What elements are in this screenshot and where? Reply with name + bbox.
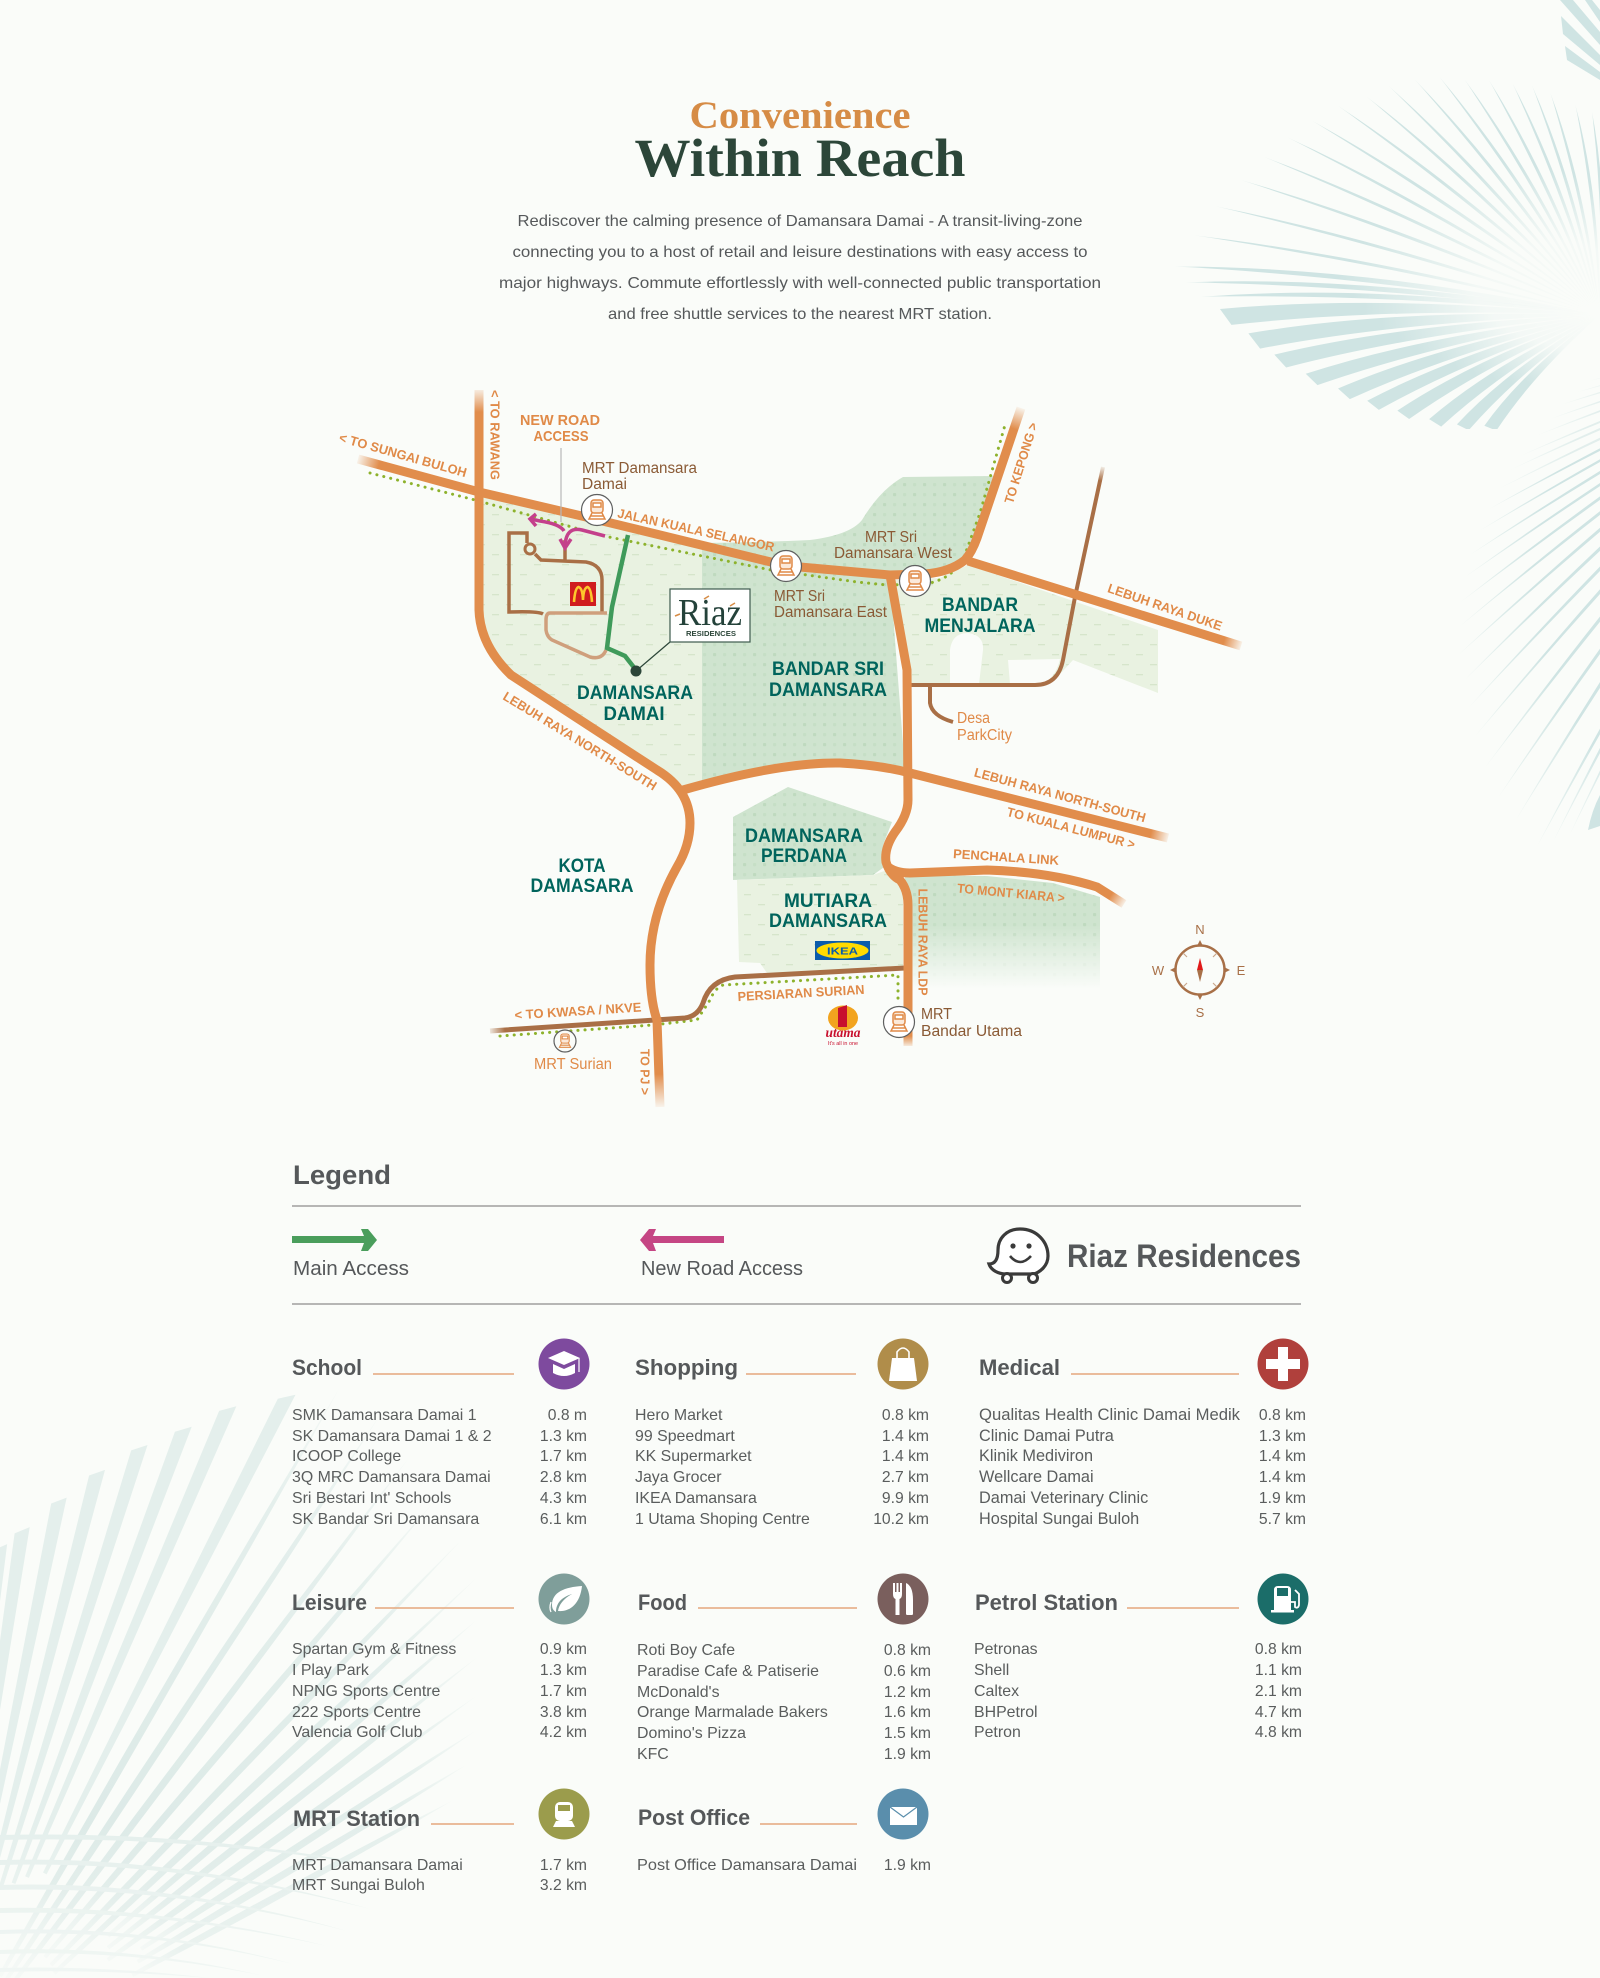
1 Utama logo: utama [826, 1026, 860, 1041]
area names: DAMANSARA [769, 680, 887, 701]
medical list: 1.3 km [1259, 1428, 1306, 1445]
school list: 1.3 km [540, 1428, 587, 1445]
shopping list: KK Supermarket [635, 1448, 752, 1465]
medical list [979, 1406, 1306, 1528]
IKEA logo: IKEA [827, 946, 859, 958]
road labels: < TO KWASA / NKVE [514, 1000, 642, 1022]
decoration: palm fan top right [1175, 72, 1600, 434]
leisure list: Valencia Golf Club [292, 1724, 423, 1741]
medical list: 1.4 km [1259, 1469, 1306, 1486]
road labels: TO KUALA LUMPUR > [1005, 804, 1137, 852]
medical list: 1.4 km [1259, 1448, 1306, 1465]
medical list: Klinik Mediviron [979, 1447, 1093, 1465]
panel: food: Food [638, 1590, 687, 1615]
area: Bandar Menjalara [895, 565, 1158, 693]
decoration: palm fan right [1452, 327, 1600, 848]
school list [292, 1407, 587, 1528]
MRT Damansara Damai station [582, 460, 697, 526]
school list: 3Q MRC Damansara Damai [292, 1469, 491, 1486]
school list: Sri Bestari Int' Schools [292, 1490, 451, 1507]
area names: DAMANSARA [769, 911, 887, 932]
waze destination name: Riaz Residences [1067, 1238, 1301, 1274]
medical list: Wellcare Damai [979, 1468, 1094, 1486]
compass [1152, 922, 1246, 1020]
icon: fork and knife [878, 1574, 928, 1624]
medical list: Qualitas Health Clinic Damai Medik [979, 1406, 1241, 1424]
waze icon [989, 1229, 1048, 1282]
Desa ParkCity label [957, 710, 1012, 744]
title: Within Reach [634, 128, 966, 188]
medical list: 5.7 km [1259, 1511, 1306, 1528]
food list: 1.6 km [884, 1704, 931, 1721]
title: Convenience [690, 94, 910, 137]
MRT Sri Damansara West station [834, 529, 953, 596]
medical list: 0.8 km [1259, 1407, 1306, 1424]
panel: MRT station [292, 1788, 590, 1894]
area names: DAMANSARA [577, 683, 693, 704]
school list: 0.8 m [548, 1407, 587, 1424]
food list: Domino's Pizza [637, 1725, 746, 1742]
MRT list: MRT Damansara Damai [292, 1857, 463, 1874]
local brown roads [490, 467, 1103, 1031]
petrol list: 4.7 km [1255, 1704, 1302, 1721]
main access green route [607, 535, 636, 670]
panel: post office: Post Office [638, 1805, 750, 1830]
petrol list: Petronas [974, 1641, 1038, 1658]
panel: post office [637, 1788, 931, 1874]
icon: shopping bag [878, 1338, 928, 1390]
leisure list: 3.8 km [540, 1704, 587, 1721]
shopping list: IKEA Damansara [635, 1490, 757, 1507]
decoration: palm fan bottom left [0, 1385, 480, 1978]
shopping list: Jaya Grocer [635, 1469, 722, 1486]
legend heading: Legend [293, 1160, 391, 1190]
panel: MRT station: MRT Station [293, 1806, 420, 1831]
MRT list [292, 1857, 587, 1894]
panel: petrol station [974, 1574, 1308, 1741]
school list: ICOOP College [292, 1448, 401, 1465]
medical list: 1.9 km [1259, 1490, 1306, 1507]
petrol list: 1.1 km [1255, 1662, 1302, 1679]
legend: new road access: New Road Access [641, 1258, 803, 1280]
shopping list: 1.4 km [882, 1428, 929, 1445]
road labels: < TO SUNGAI BULOH [337, 430, 469, 480]
area names: BANDAR SRI [772, 659, 884, 680]
food list: Roti Boy Cafe [637, 1642, 735, 1659]
map [337, 386, 1246, 1110]
decoration: palm broad stroke right [1588, 795, 1600, 830]
Riaz pin and logo [630, 589, 750, 676]
area: Damansara Perdana [733, 787, 892, 880]
Riaz pin and logo: Riaz [678, 592, 742, 634]
decoration: bottom corner fade [0, 1820, 420, 1978]
MRT Sri Damansara East station [770, 550, 888, 621]
petrol list: Shell [974, 1662, 1009, 1679]
road labels: PENCHALA LINK [953, 846, 1060, 868]
school list: 2.8 km [540, 1469, 587, 1486]
compass: N [1195, 922, 1205, 937]
icon: leaf [538, 1574, 590, 1624]
Desa ParkCity label: ParkCity [957, 727, 1012, 744]
panel: petrol station: Petrol Station [975, 1590, 1118, 1615]
petrol list [974, 1641, 1302, 1741]
road labels: LEBUH RAYA NORTH-SOUTH [500, 689, 660, 793]
school list: 6.1 km [540, 1511, 587, 1528]
1 Utama logo: It's all in one [828, 1041, 858, 1047]
shopping list: Hero Market [635, 1407, 723, 1424]
local tan road [546, 613, 607, 658]
food list: 1.9 km [884, 1746, 931, 1763]
food list: Orange Marmalade Bakers [637, 1704, 828, 1721]
petrol list: 2.1 km [1255, 1683, 1302, 1700]
icon: petrol pump [1258, 1574, 1308, 1624]
MRT Sri Damansara East station: MRT Sri [774, 588, 825, 605]
area names [530, 595, 1036, 932]
area fade: Mont Kiara [905, 925, 1110, 1010]
MRT Surian station [534, 1030, 612, 1073]
new road access label: NEW ROAD [520, 412, 600, 429]
shopping list: 9.9 km [882, 1490, 929, 1507]
road labels: TO PJ > [638, 1049, 652, 1095]
leisure list: 4.2 km [540, 1724, 587, 1741]
shopping list: 2.7 km [882, 1469, 929, 1486]
food list: 0.8 km [884, 1642, 931, 1659]
food list: 0.6 km [884, 1663, 931, 1680]
food list: Paradise Cafe & Patiserie [637, 1663, 819, 1680]
panel: school: School [292, 1355, 362, 1380]
intro paragraph: major highways. Commute effortlessly with well-connected public transportation [499, 275, 1101, 292]
compass: S [1196, 1005, 1205, 1020]
panel: shopping: Shopping [635, 1355, 738, 1380]
Riaz pin and logo: RESIDENCES [686, 631, 736, 638]
shopping list [635, 1407, 929, 1528]
MRT list: MRT Sungai Buloh [292, 1877, 425, 1894]
food list [637, 1642, 931, 1763]
leisure list: 1.3 km [540, 1662, 587, 1679]
food list: 1.2 km [884, 1684, 931, 1701]
leisure list: I Play Park [292, 1662, 369, 1679]
legend: main access [292, 1229, 409, 1280]
MRT list: 3.2 km [540, 1877, 587, 1894]
decoration: palm corner top right [1560, 0, 1600, 80]
icon: envelope [878, 1788, 928, 1840]
school list: SMK Damansara Damai 1 [292, 1407, 477, 1424]
area: Mont Kiara [905, 875, 1100, 1000]
shopping list: 0.8 km [882, 1407, 929, 1424]
area names: DAMANSARA [745, 826, 863, 847]
1 Utama logo [826, 1005, 860, 1047]
medical list: Hospital Sungai Buloh [979, 1510, 1139, 1528]
new road access label [520, 412, 600, 445]
panel: shopping [635, 1338, 929, 1528]
road labels: LEBUH RAYA NORTH-SOUTH [973, 765, 1147, 825]
panel: leisure [292, 1574, 590, 1741]
icon: graduation cap [538, 1338, 590, 1390]
post office list: 1.9 km [884, 1857, 931, 1874]
shopping list: 1 Utama Shoping Centre [635, 1511, 810, 1528]
title [634, 94, 966, 188]
road fade ends [354, 386, 1245, 1110]
MRT Sri Damansara East station: Damansara East [774, 604, 888, 621]
road labels: TO KEPONG > [1001, 420, 1041, 505]
medical list: Damai Veterinary Clinic [979, 1489, 1148, 1507]
Desa ParkCity label: Desa [957, 710, 990, 727]
new road access label: ACCESS [534, 428, 588, 445]
food list: McDonald's [637, 1684, 720, 1701]
road labels [337, 390, 1224, 1095]
panel: medical: Medical [979, 1355, 1060, 1380]
MRT dotted line [370, 425, 1005, 1036]
area names: MUTIARA [784, 891, 872, 912]
intro paragraph: Rediscover the calming presence of Damansara Damai - A transit-living-zone [518, 213, 1083, 230]
legend rules [292, 1206, 1301, 1304]
area names: MENJALARA [924, 616, 1036, 637]
leisure list: 1.7 km [540, 1683, 587, 1700]
school list: 4.3 km [540, 1490, 587, 1507]
legend: new road access [640, 1229, 803, 1280]
leisure list: Spartan Gym & Fitness [292, 1641, 456, 1658]
MRT Sri Damansara West station: Damansara West [834, 545, 953, 562]
icon: train [538, 1788, 590, 1840]
panel: school [292, 1338, 590, 1528]
new road access magenta arrows [530, 514, 605, 548]
MRT Bandar Utama station: Bandar Utama [921, 1023, 1022, 1040]
intro paragraph: connecting you to a host of retail and leisure destinations with easy access to [512, 244, 1088, 261]
school list: 1.7 km [540, 1448, 587, 1465]
MRT list: 1.7 km [540, 1857, 587, 1874]
panel: food [637, 1574, 931, 1763]
school list: SK Bandar Sri Damansara [292, 1511, 479, 1528]
petrol list: Caltex [974, 1683, 1019, 1700]
compass: W [1152, 963, 1165, 978]
road labels: TO MONT KIARA > [957, 881, 1066, 905]
food list: KFC [637, 1746, 669, 1763]
petrol list: Petron [974, 1724, 1021, 1741]
area names: BANDAR [942, 595, 1018, 616]
leisure list: 222 Sports Centre [292, 1704, 421, 1721]
area: Menjalara notches [950, 633, 1060, 684]
school list: SK Damansara Damai 1 & 2 [292, 1428, 492, 1445]
area names: PERDANA [761, 846, 847, 867]
new road access leader line [560, 448, 562, 522]
area names: DAMAI [604, 704, 664, 725]
IKEA logo [815, 941, 870, 960]
petrol list: BHPetrol [974, 1704, 1038, 1721]
icon: medical cross [1258, 1338, 1308, 1390]
panel: leisure: Leisure [292, 1590, 367, 1615]
leisure list: NPNG Sports Centre [292, 1683, 441, 1700]
shopping list: 1.4 km [882, 1448, 929, 1465]
shopping list: 99 Speedmart [635, 1428, 735, 1445]
road labels: JALAN KUALA SELANGOR [616, 505, 776, 555]
leisure list: 0.9 km [540, 1641, 587, 1658]
leisure list [292, 1641, 587, 1741]
MRT Bandar Utama station [884, 1006, 1022, 1040]
petrol list: 0.8 km [1255, 1641, 1302, 1658]
road labels: LEBUH RAYA LDP [916, 888, 930, 996]
MRT Bandar Utama station: MRT [921, 1006, 952, 1023]
panel: medical [979, 1338, 1308, 1528]
food list: 1.5 km [884, 1725, 931, 1742]
area: Damansara Damai [479, 495, 702, 787]
MRT Damansara Damai station: Damai [582, 476, 627, 493]
medical list: Clinic Damai Putra [979, 1427, 1115, 1445]
petrol list: 4.8 km [1255, 1724, 1302, 1741]
McDonald's logo [570, 582, 596, 606]
legend: main access: Main Access [293, 1258, 409, 1280]
area: Bandar Sri Damansara [680, 476, 993, 787]
road labels: < TO RAWANG [488, 390, 502, 480]
area names: DAMASARA [530, 876, 634, 897]
MRT Surian station: MRT Surian [534, 1056, 612, 1073]
highways [358, 390, 1241, 1107]
compass: E [1237, 963, 1246, 978]
post office list: Post Office Damansara Damai [637, 1857, 857, 1874]
road labels: PERSIARAN SURIAN [737, 982, 865, 1004]
MRT Damansara Damai station: MRT Damansara [582, 460, 697, 477]
shopping list: 10.2 km [873, 1511, 929, 1528]
intro paragraph: and free shuttle services to the nearest MRT station. [608, 306, 992, 323]
area: Mutiara Damansara [737, 870, 903, 973]
area names: KOTA [558, 856, 606, 877]
intro paragraph [499, 213, 1101, 323]
road labels: LEBUH RAYA DUKE [1106, 580, 1224, 634]
MRT Sri Damansara West station: MRT Sri [865, 529, 917, 546]
